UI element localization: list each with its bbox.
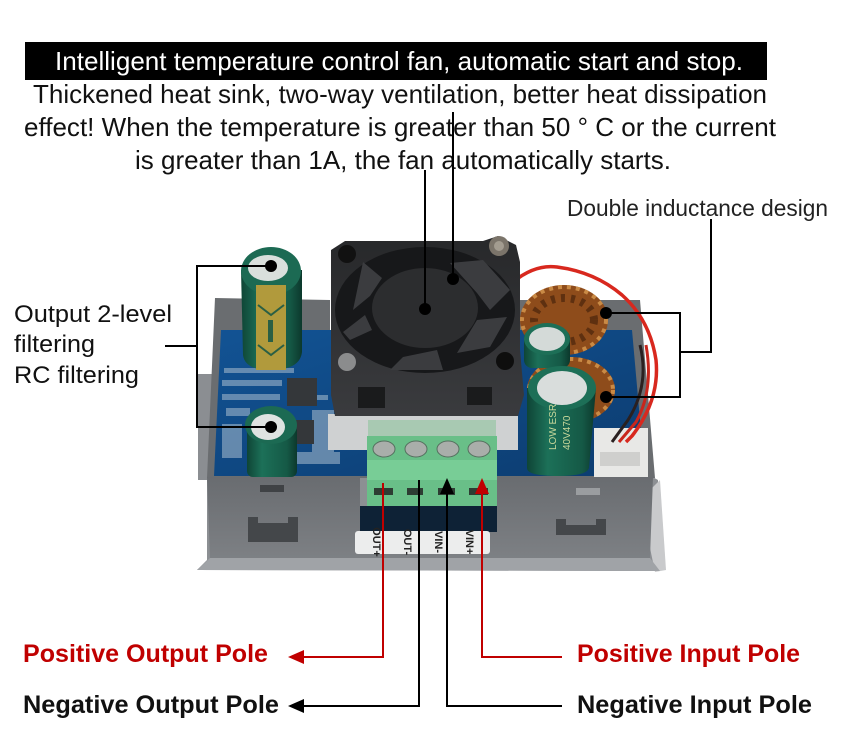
callout: output filtering <box>14 260 277 433</box>
callout: double inductance <box>567 195 828 403</box>
toroidal inductor bottom <box>527 357 615 423</box>
board below terminal <box>360 506 497 532</box>
small capacitor right <box>524 330 570 368</box>
callout: double inductance: Double inductance design <box>567 195 828 221</box>
device photo illustration <box>197 236 666 572</box>
connector white <box>594 428 648 477</box>
description text: Thickened heat sink, two-way ventilation, better heat dissipation <box>33 79 767 109</box>
description text <box>24 79 777 175</box>
circuit detail <box>222 368 340 464</box>
white pin label: VIN- <box>432 531 444 553</box>
negative output pole label and arrow <box>23 480 419 719</box>
back plate <box>197 373 660 571</box>
description text: is greater than 1A, the fan automatically starts. <box>135 145 671 175</box>
white pin label: OUT+ <box>370 527 382 557</box>
white pin label: VIN+ <box>463 530 475 554</box>
positive output pole label and arrow <box>23 483 383 668</box>
heat sink <box>328 414 518 450</box>
positive input pole label and arrow: Positive Input Pole <box>577 640 800 668</box>
negative output pole label and arrow: Negative Output Pole <box>23 691 279 719</box>
case latches <box>248 517 298 542</box>
positive input pole label and arrow <box>475 478 800 668</box>
callout: fan leader lines <box>419 112 459 315</box>
white pin label <box>355 527 490 557</box>
callout: output filtering: filtering <box>14 331 95 358</box>
case rear walls <box>207 298 655 478</box>
description text: effect! When the temperature is greater than 50 ° C or the current <box>24 112 777 142</box>
wires <box>513 267 656 442</box>
device photo illustration: LOW ESR <box>548 404 559 450</box>
title banner: Intelligent temperature control fan, automatic start and stop. <box>55 46 743 76</box>
positive output pole label and arrow: Positive Output Pole <box>23 640 268 668</box>
negative input pole label and arrow <box>440 478 812 719</box>
white pin label: OUT- <box>401 529 413 555</box>
chip <box>287 378 317 406</box>
callout: output filtering: RC filtering <box>14 362 139 389</box>
front wall <box>207 477 653 558</box>
pcb <box>214 330 645 476</box>
short capacitor left <box>247 425 297 477</box>
big capacitor right <box>527 388 596 476</box>
green terminal block <box>367 436 497 506</box>
negative input pole label and arrow: Negative Input Pole <box>577 691 812 719</box>
callout: output filtering: Output 2-level <box>14 301 172 328</box>
device photo illustration: 40V470 <box>562 415 573 450</box>
tall capacitor left <box>241 270 302 370</box>
fan <box>331 236 524 416</box>
toroidal inductor top <box>520 285 608 355</box>
